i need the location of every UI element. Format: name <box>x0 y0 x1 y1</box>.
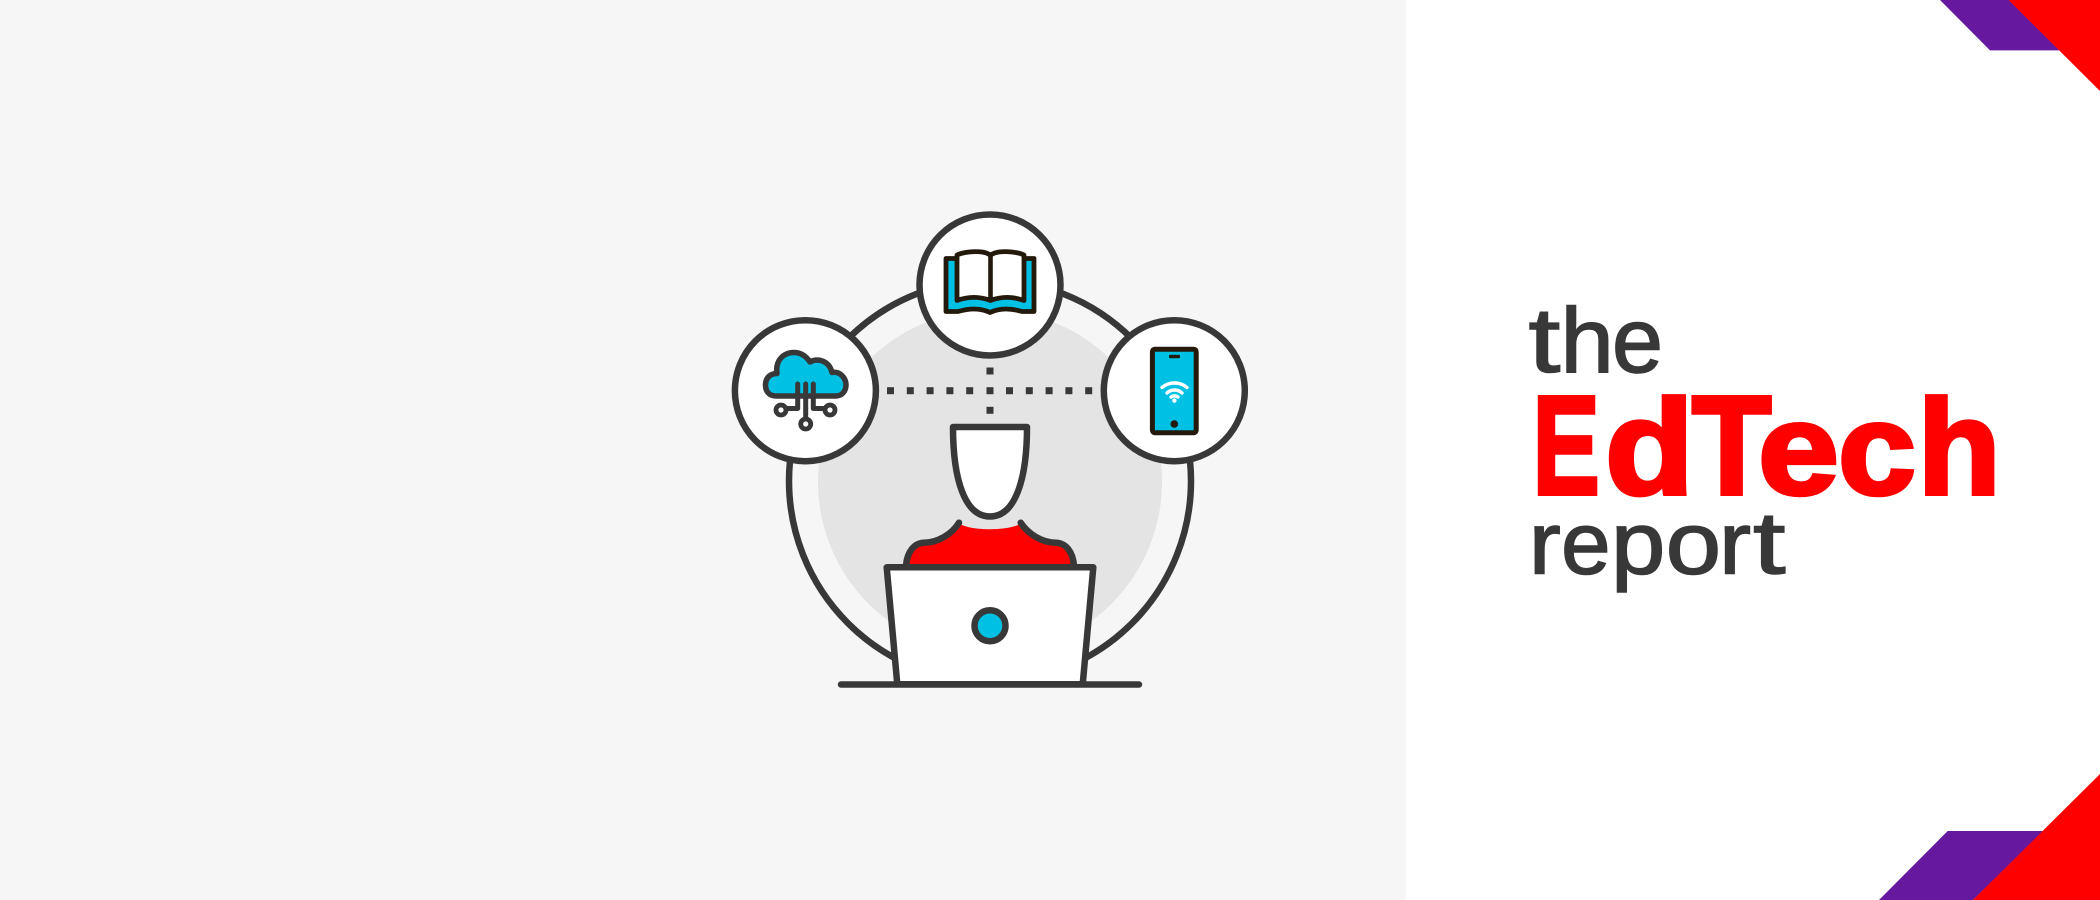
title line: the: t <box>1528 290 1560 392</box>
panel: illustration background <box>0 0 1406 900</box>
torso <box>906 523 1074 567</box>
title line: EdTech: E <box>1532 366 1600 524</box>
title line: the: e <box>1612 290 1663 392</box>
title line: report: r <box>1719 494 1751 592</box>
title line: report: t <box>1753 494 1786 592</box>
illustration: person with laptop and learning technology <box>735 214 1245 684</box>
panel: title background <box>1406 0 2100 900</box>
title line: EdTech: h <box>1918 372 2001 523</box>
title line: report: e <box>1561 494 1611 592</box>
corner decoration: top right <box>1940 0 2100 91</box>
title line: report: r <box>1529 494 1561 592</box>
dotted connector lines <box>887 368 1092 414</box>
head <box>953 427 1027 516</box>
title line: report: o <box>1666 494 1721 592</box>
title line: report: p <box>1611 494 1665 592</box>
laptop <box>887 567 1093 684</box>
title line: EdTech: d <box>1605 372 1694 523</box>
corner decoration: bottom right <box>1879 774 2100 900</box>
icon circle: cloud computing <box>735 320 876 461</box>
title: the EdTech report <box>1528 290 2001 592</box>
icon circle: open book <box>920 214 1060 356</box>
title line: EdTech: e <box>1758 376 1839 522</box>
desk line <box>841 681 1139 688</box>
title line: EdTech: c <box>1838 376 1916 522</box>
icon circle: smartphone with wifi <box>1104 320 1245 461</box>
grey inner disc <box>818 310 1162 654</box>
title line: EdTech: T <box>1692 366 1772 524</box>
title line: the: h <box>1560 290 1614 392</box>
background ring <box>789 280 1191 682</box>
